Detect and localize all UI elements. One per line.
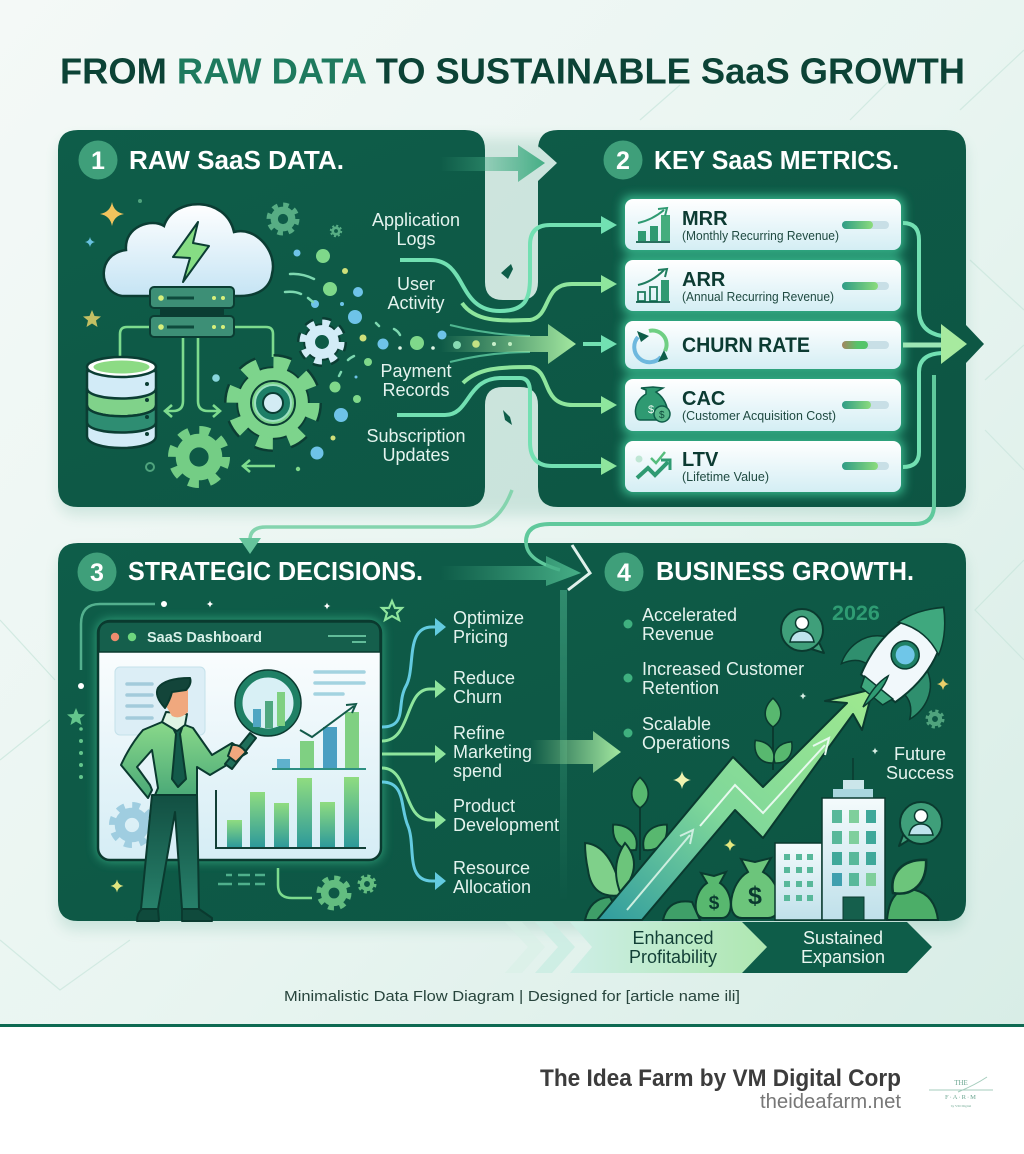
data source labels: Activity — [387, 293, 445, 313]
text lines — [315, 672, 364, 694]
card: LTV: LTV — [682, 449, 719, 471]
divider strip — [560, 590, 567, 900]
data source labels: Updates — [382, 445, 450, 465]
panel shadow bottom — [58, 551, 966, 930]
future success label: Future — [894, 744, 946, 764]
data source labels: User — [397, 274, 435, 294]
badge 3: 3 — [90, 559, 104, 587]
chevron edge — [568, 545, 590, 590]
panel 2: key SaaS metrics — [604, 140, 904, 495]
badge 1 — [78, 140, 118, 180]
card: CAC: CAC — [682, 388, 725, 410]
icon: server — [150, 287, 234, 337]
output flow lines — [903, 223, 942, 467]
arrow: panel 3 to panel 4 — [440, 556, 581, 586]
card: MRR: MRR — [682, 208, 728, 230]
panel 4: business growth — [585, 552, 980, 920]
decision labels: Development — [453, 815, 559, 835]
card: LTV — [625, 441, 901, 492]
arrowhead: into panel 3 — [239, 538, 261, 554]
badge 4 — [604, 552, 644, 592]
card: MRR — [625, 199, 901, 250]
branch arrowheads — [435, 618, 446, 890]
logo: THE — [954, 1079, 968, 1087]
bottom bar chart — [216, 777, 366, 848]
ribbon: enhanced profitability: Profitability — [629, 947, 717, 967]
icon: MRR chart — [636, 208, 670, 242]
icon: churn cycle — [634, 331, 668, 362]
icon: tiny gear — [331, 226, 341, 236]
icon: white gear — [300, 320, 344, 364]
growth bullets: Increased Customer — [642, 659, 804, 679]
decision labels: Product — [453, 796, 515, 816]
heading 1: RAW SaaS DATA. — [129, 147, 344, 175]
badge 3 — [78, 552, 116, 592]
card: CAC: (Customer Acquisition Cost) — [682, 409, 836, 423]
icon: top gear — [269, 205, 297, 233]
icon: money bag: $ — [659, 410, 665, 421]
card: CAC — [625, 379, 901, 431]
ribbon: sustained expansion: Expansion — [801, 947, 885, 967]
flow specks — [501, 264, 513, 425]
document card — [115, 667, 205, 735]
data source labels: Logs — [396, 229, 436, 249]
badge 4: 4 — [617, 559, 631, 587]
future success label: Success — [886, 763, 954, 783]
icon: small gear — [172, 430, 226, 484]
decision labels: spend — [453, 761, 502, 781]
icon: analyst with magnifier — [121, 670, 301, 921]
flow lines to metrics — [397, 225, 602, 466]
money bags — [696, 858, 780, 918]
icon: gear group — [319, 876, 375, 908]
arrow: decisions to growth — [530, 731, 621, 773]
progress bar: MRR — [842, 221, 889, 229]
money bags: $ — [748, 882, 762, 910]
icon: cloud with bolt — [104, 204, 273, 296]
decision labels: Refine — [453, 723, 505, 743]
growth bullets: Revenue — [642, 624, 714, 644]
connector loop — [526, 542, 560, 570]
money bags: $ — [709, 893, 720, 914]
heading 4: BUSINESS GROWTH. — [656, 558, 914, 586]
ribbon: sustained expansion: Sustained — [803, 928, 883, 948]
progress bar: churn — [842, 341, 889, 349]
card: LTV: (Lifetime Value) — [682, 470, 769, 484]
data source labels: Payment — [380, 361, 452, 381]
metric input arrowheads — [601, 216, 617, 475]
caption: Minimalistic Data Flow Diagram | Designed for [article name ili] — [284, 988, 740, 1005]
buildings — [775, 758, 885, 920]
card glows — [622, 196, 904, 495]
ribbon: enhanced profitability: Enhanced — [632, 928, 714, 948]
icon: money bag: $ — [648, 404, 654, 416]
dashboard window — [96, 619, 383, 862]
brand name: The Idea Farm by VM Digital Corp — [540, 1065, 901, 1092]
decision labels: Resource — [453, 858, 530, 878]
heading 2: KEY SaaS METRICS. — [654, 147, 899, 175]
panels 1 and 2 background — [58, 130, 984, 507]
icon: LTV trend — [636, 452, 670, 478]
badge 2 — [604, 140, 642, 180]
card: ARR: ARR — [682, 269, 726, 291]
connector lines — [120, 327, 275, 472]
progress bar: LTV — [842, 462, 889, 470]
decorative circuit — [67, 600, 402, 898]
badge 2: 2 — [616, 147, 630, 175]
growth bullets: Operations — [642, 733, 730, 753]
top bar chart — [272, 704, 366, 769]
connector: raw data to decisions — [250, 490, 512, 540]
icon: large gear — [231, 361, 315, 445]
ribbon: enhanced profitability — [505, 922, 767, 973]
decision labels: Optimize — [453, 608, 524, 628]
panels 3 and 4 background — [58, 543, 966, 921]
brand url: theideafarm.net — [760, 1091, 901, 1113]
logo — [929, 1077, 993, 1108]
card: ARR — [625, 260, 901, 311]
panel shadow top — [58, 138, 966, 515]
card: MRR: (Monthly Recurring Revenue) — [682, 229, 839, 243]
icon: avatar bubble lower — [899, 802, 942, 846]
icon: avatar bubble top — [781, 609, 824, 653]
growth bullets — [624, 605, 804, 753]
data source labels — [366, 210, 466, 465]
panel 1: raw SaaS data — [78, 140, 512, 484]
icon: rocket — [827, 578, 980, 736]
icon: database — [87, 357, 156, 448]
logo: by VM Digital — [951, 1104, 971, 1108]
panel 3: strategic decisions — [67, 552, 559, 921]
decision labels: Reduce — [453, 668, 515, 688]
decorative stars — [83, 202, 124, 327]
growth bullets: Retention — [642, 678, 719, 698]
faded gear — [112, 805, 152, 845]
growth zigzag arrow — [597, 689, 873, 920]
card: churn rate: CHURN RATE — [682, 333, 810, 357]
output arrow — [941, 324, 967, 364]
year label: 2026 — [832, 601, 880, 625]
card: ARR: (Annual Recurring Revenue) — [682, 290, 834, 304]
title: FROM RAW DATA TO SUSTAINABLE SaaS GROWTH — [60, 50, 965, 92]
footer — [0, 1024, 1024, 1154]
decision labels: Marketing — [453, 742, 532, 762]
badge 1: 1 — [91, 147, 105, 175]
logo: F·A·R·M — [945, 1094, 977, 1101]
progress bar: CAC — [842, 401, 889, 409]
growth sparkles — [673, 678, 949, 851]
growth bullets: Scalable — [642, 714, 711, 734]
branch arrows — [382, 627, 437, 881]
decision labels: Churn — [453, 687, 502, 707]
icon: ARR chart — [636, 269, 670, 302]
data particles — [138, 199, 512, 471]
decision labels: Pricing — [453, 627, 508, 647]
future success label — [886, 744, 954, 783]
dashboard window: SaaS Dashboard — [147, 630, 262, 646]
decision labels — [453, 608, 559, 897]
arrow: panel 1 to panel 2 — [440, 145, 545, 182]
connector: metrics to growth — [526, 375, 934, 542]
growth bullets: Accelerated — [642, 605, 737, 625]
card: churn rate — [625, 321, 901, 369]
data source labels: Application — [372, 210, 460, 230]
icon: money bag — [635, 387, 670, 422]
center flow arrow — [440, 324, 576, 364]
decision labels: Allocation — [453, 877, 531, 897]
heading 3: STRATEGIC DECISIONS. — [128, 558, 423, 586]
data source labels: Records — [382, 380, 450, 400]
plants — [585, 698, 938, 920]
data source labels: Subscription — [366, 426, 466, 446]
ribbon: sustained expansion — [742, 922, 932, 973]
progress bar: ARR — [842, 282, 889, 290]
